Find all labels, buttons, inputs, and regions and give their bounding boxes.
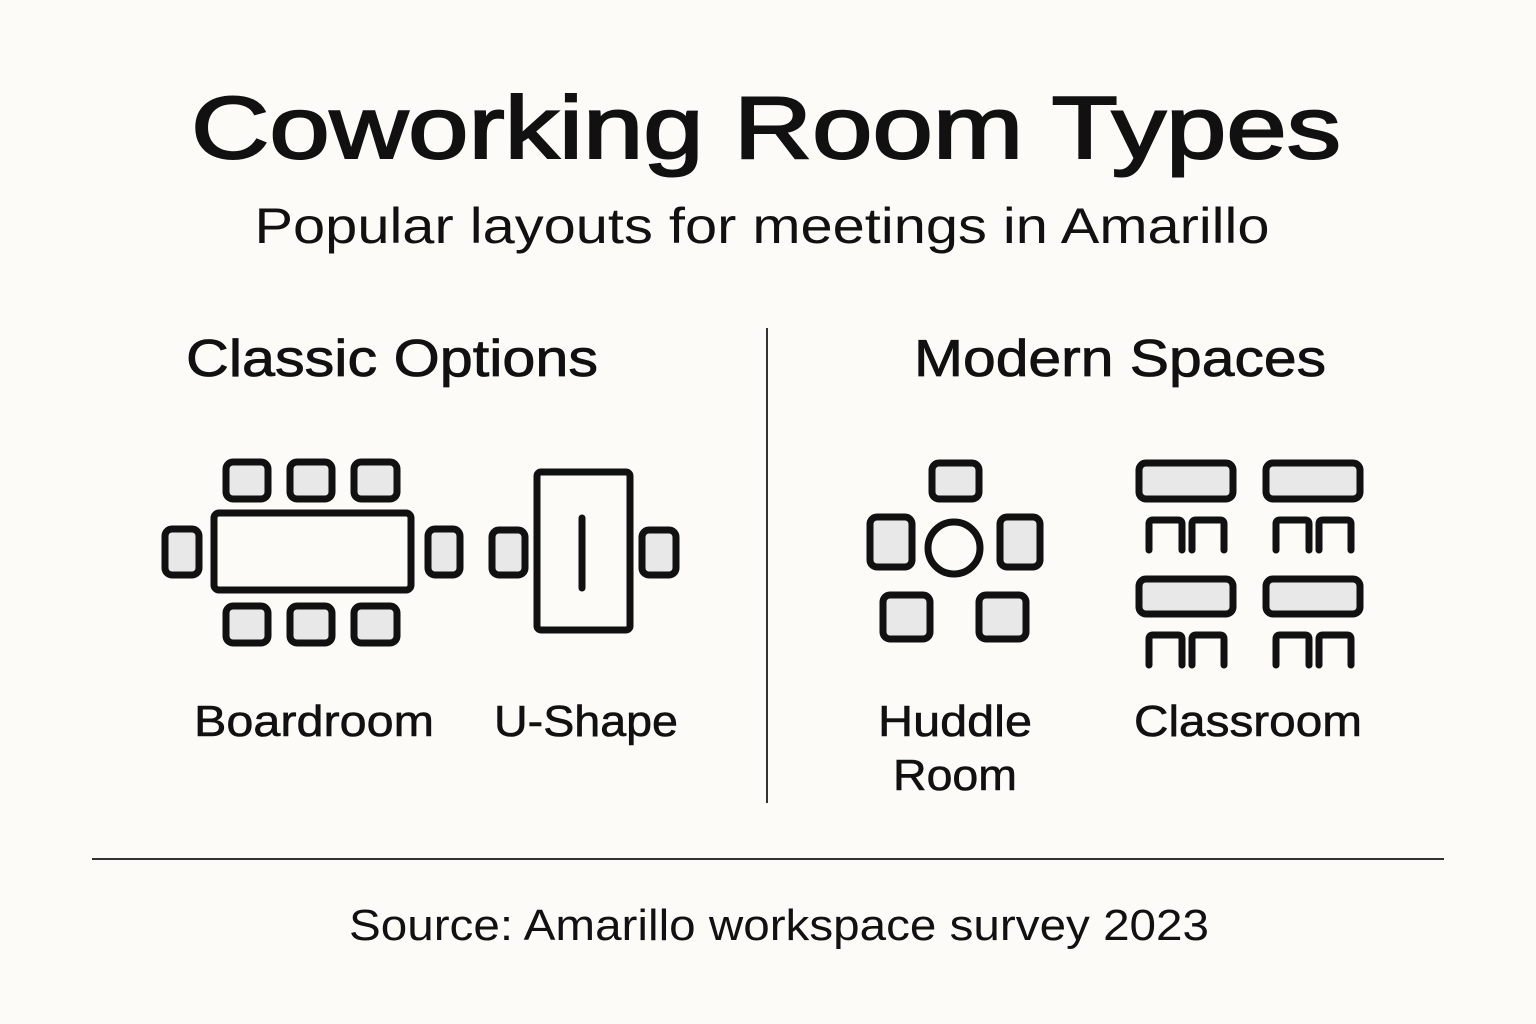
icon: classroom [1139, 463, 1360, 665]
label: Boardroom: Boardroom [194, 697, 434, 746]
subtitle: Popular layouts for meetings in Amarillo [254, 198, 1270, 254]
label: Huddle Room: Huddle [878, 697, 1032, 746]
heading: Classic Options: Classic Options [186, 330, 598, 388]
label: Huddle Room line 2: Room [893, 751, 1017, 800]
heading: Modern Spaces: Modern Spaces [914, 330, 1326, 388]
label: U-Shape: U-Shape [494, 697, 678, 746]
icon: huddle room [870, 463, 1040, 639]
title: Coworking Room Types [191, 78, 1341, 177]
label: Classroom: Classroom [1134, 697, 1362, 746]
icon: u-shape [492, 472, 676, 630]
source note: Source: Amarillo workspace survey 2023 [349, 901, 1209, 950]
icon: boardroom [165, 462, 460, 643]
